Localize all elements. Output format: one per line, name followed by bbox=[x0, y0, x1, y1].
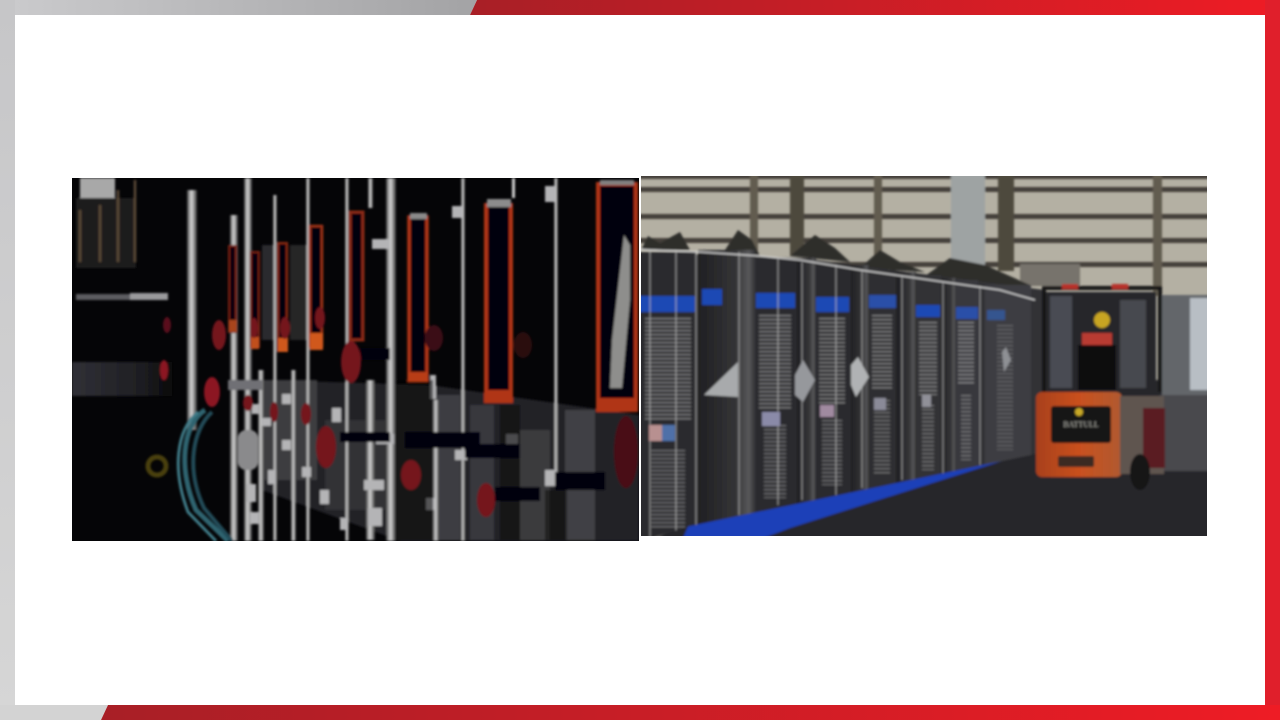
right bar red bbox=[1265, 0, 1280, 720]
bag bodies bbox=[694, 254, 1044, 526]
warehouse wall bbox=[630, 170, 1220, 296]
blue pallet row bbox=[682, 460, 1001, 536]
orange gauge frames bbox=[229, 184, 636, 410]
printed label speckle bbox=[668, 315, 1005, 530]
dark bag sides bbox=[698, 250, 956, 540]
bag logos bbox=[649, 395, 931, 441]
far right bags bbox=[1160, 294, 1207, 472]
bag printed panels bbox=[630, 252, 1031, 548]
silver bag flaps bbox=[704, 347, 1011, 402]
floor bbox=[658, 378, 1207, 536]
forklift bbox=[1036, 284, 1165, 490]
grey steel panels bbox=[262, 245, 639, 541]
pipe fittings bbox=[247, 186, 557, 530]
blue bag stripes bbox=[630, 289, 1005, 320]
teal cables bbox=[178, 410, 232, 541]
bag rim wire bbox=[630, 249, 1035, 300]
bottom bar grey segment bbox=[0, 705, 108, 720]
bottom bar red segment bbox=[101, 705, 1280, 720]
yellow ring bbox=[148, 457, 166, 475]
photo: bagged material warehouse with forklift bbox=[630, 170, 1222, 550]
photo: refinery valve wall bbox=[72, 178, 639, 541]
black valve stems bbox=[340, 348, 605, 540]
wheels bbox=[1130, 454, 1150, 490]
forklift brand: BATTULL bbox=[1063, 420, 1099, 429]
frame feet and paper bbox=[229, 180, 638, 412]
silver pipes bbox=[187, 178, 558, 541]
bag group bbox=[630, 250, 1045, 548]
driver bbox=[1078, 312, 1116, 390]
mast cage bbox=[1044, 284, 1160, 392]
bag seam lines bbox=[650, 250, 980, 545]
top bar red segment bbox=[470, 0, 1280, 15]
top bar grey segment bbox=[0, 0, 477, 15]
red hand valves bbox=[160, 307, 638, 517]
background walkway bbox=[72, 178, 172, 396]
bag tops bbox=[641, 229, 1030, 286]
body bbox=[1036, 392, 1122, 477]
left bar grey bbox=[0, 0, 15, 720]
